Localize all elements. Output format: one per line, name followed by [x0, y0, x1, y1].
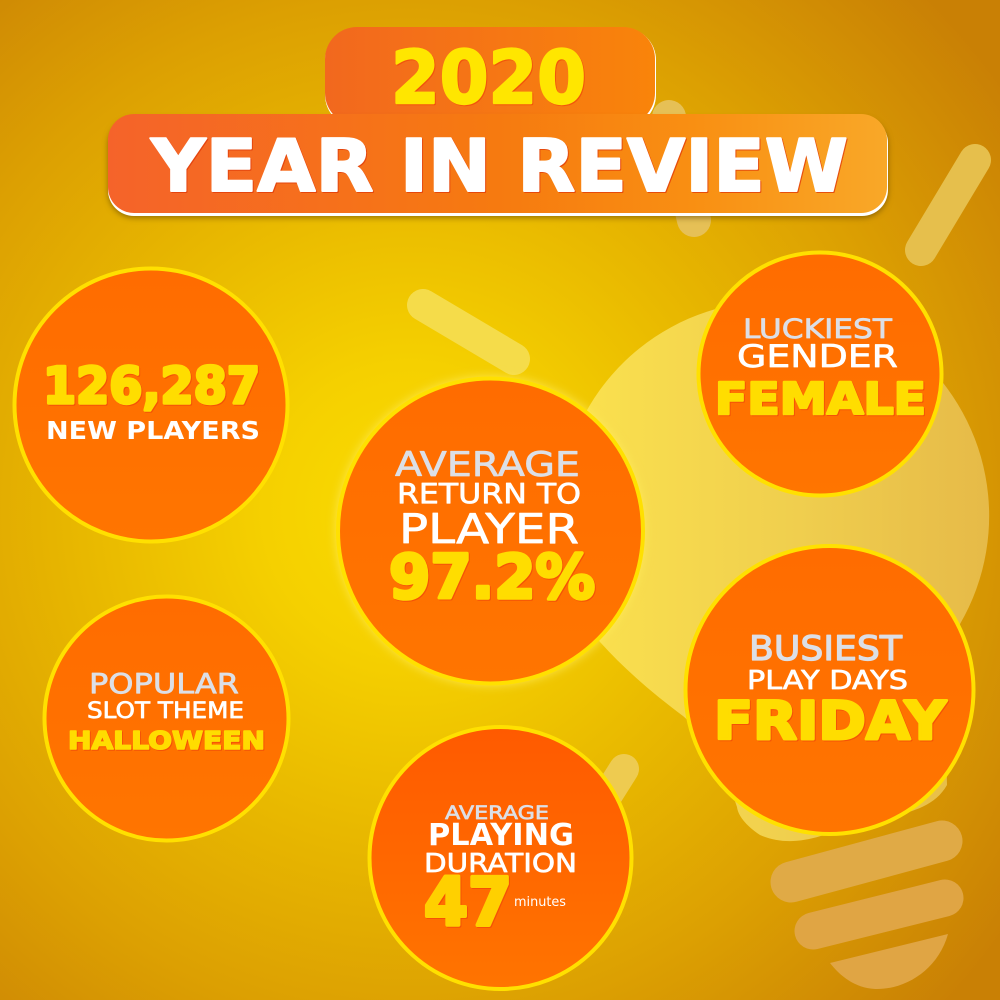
panel: average playing duration [370, 727, 632, 989]
banner: 2020 [325, 27, 656, 127]
panel: luckiest gender [698, 252, 942, 496]
label: playing: PLAYING [428, 818, 574, 853]
label: new players: NEW PLAYERS [46, 416, 260, 445]
bulb cap [830, 934, 948, 989]
panel: popular slot theme [44, 596, 288, 840]
banner: year in review: YEAR IN REVIEW [150, 124, 848, 208]
light ray: centre left [423, 305, 514, 359]
panel: busiest play days [686, 546, 974, 834]
label: return to: RETURN TO [397, 478, 581, 510]
stat: friday: FRIDAY [714, 691, 947, 752]
banner: 2020: 2020 [391, 36, 586, 121]
icon: light bulb [559, 301, 989, 989]
panel: average return to player [338, 378, 643, 684]
label: gender: GENDER [737, 339, 898, 375]
label: slot theme: SLOT THEME [87, 699, 244, 724]
panel: new players [14, 268, 288, 542]
stat: 97.2%: 97.2% [389, 542, 595, 613]
label: popular: POPULAR [89, 668, 239, 700]
label: minutes: minutes [514, 895, 566, 910]
label: duration: DURATION [424, 849, 577, 879]
label: luckiest: LUCKIEST [743, 314, 893, 345]
stat: 47: 47 [424, 864, 512, 941]
screw thread 1 [791, 841, 942, 882]
label: average: AVERAGE [395, 445, 580, 485]
light ray: bottom [595, 769, 624, 815]
title banner [108, 27, 888, 216]
label: average: AVERAGE [445, 802, 549, 824]
stat: halloween: HALLOWEEN [68, 726, 265, 755]
label: play days: PLAY DAYS [747, 666, 908, 696]
stat: female: FEMALE [715, 374, 926, 425]
light ray: top right [921, 160, 975, 250]
light ray: top [669, 117, 694, 220]
label: player: PLAYER [399, 505, 579, 553]
stat: 126,287: 126,287 [43, 357, 260, 415]
screw thread 2 [813, 898, 945, 931]
bulb glass [559, 301, 989, 841]
label: busiest: BUSIEST [749, 629, 902, 669]
